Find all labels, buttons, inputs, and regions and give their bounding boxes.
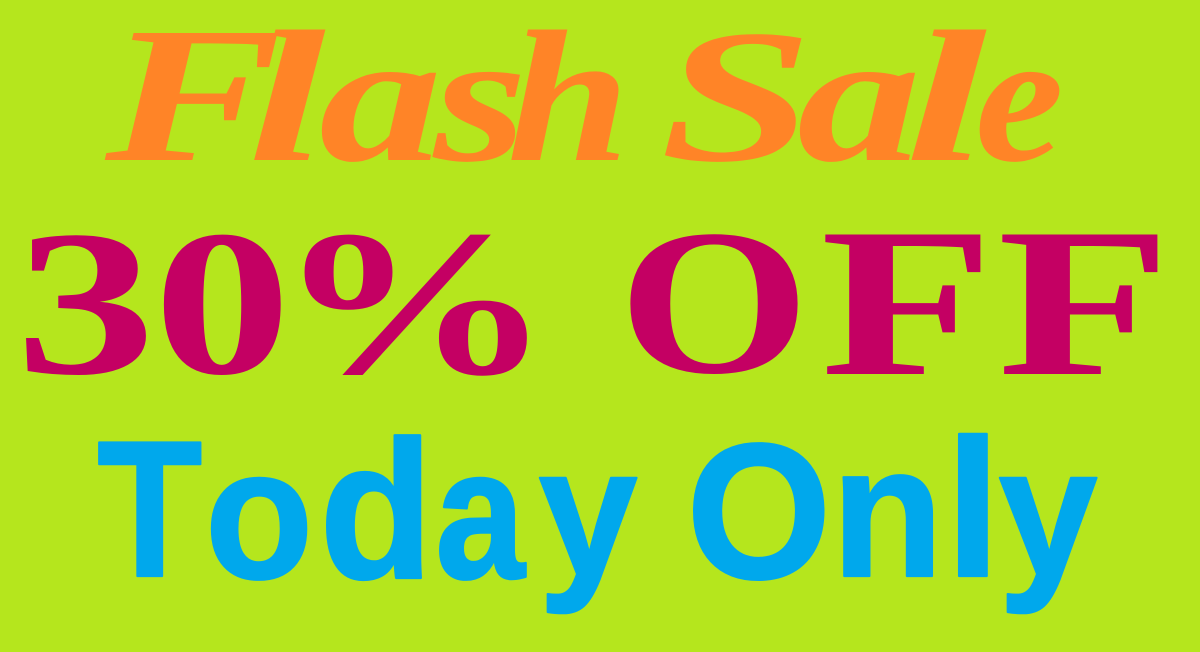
subheading: Today Only: d (320, 400, 433, 620)
discount: 30% OFF: % (276, 188, 553, 418)
discount: 30% OFF (16, 185, 1171, 421)
discount: 30% OFF: 3 (16, 188, 155, 419)
discount: 30% OFF: 0 (153, 187, 291, 418)
discount: 30% OFF: F (820, 185, 994, 421)
discount: 30% OFF: F (998, 185, 1171, 421)
subheading: Today Only: n (832, 408, 943, 616)
subheading: Today Only: o (205, 411, 313, 618)
subheading: Today Only: l (945, 399, 1001, 618)
subheading: Today Only: a (435, 410, 526, 618)
heading: Flash Sale: a (319, 0, 442, 201)
subheading: Today Only: T (97, 400, 202, 617)
heading: Flash Sale (104, 0, 1064, 203)
subheading: Today Only: y (998, 409, 1098, 615)
subheading: Today Only: O (686, 404, 831, 620)
discount: 30% OFF: O (618, 187, 810, 418)
subheading: Today Only (97, 399, 1098, 620)
subheading: Today Only: y (538, 409, 638, 615)
